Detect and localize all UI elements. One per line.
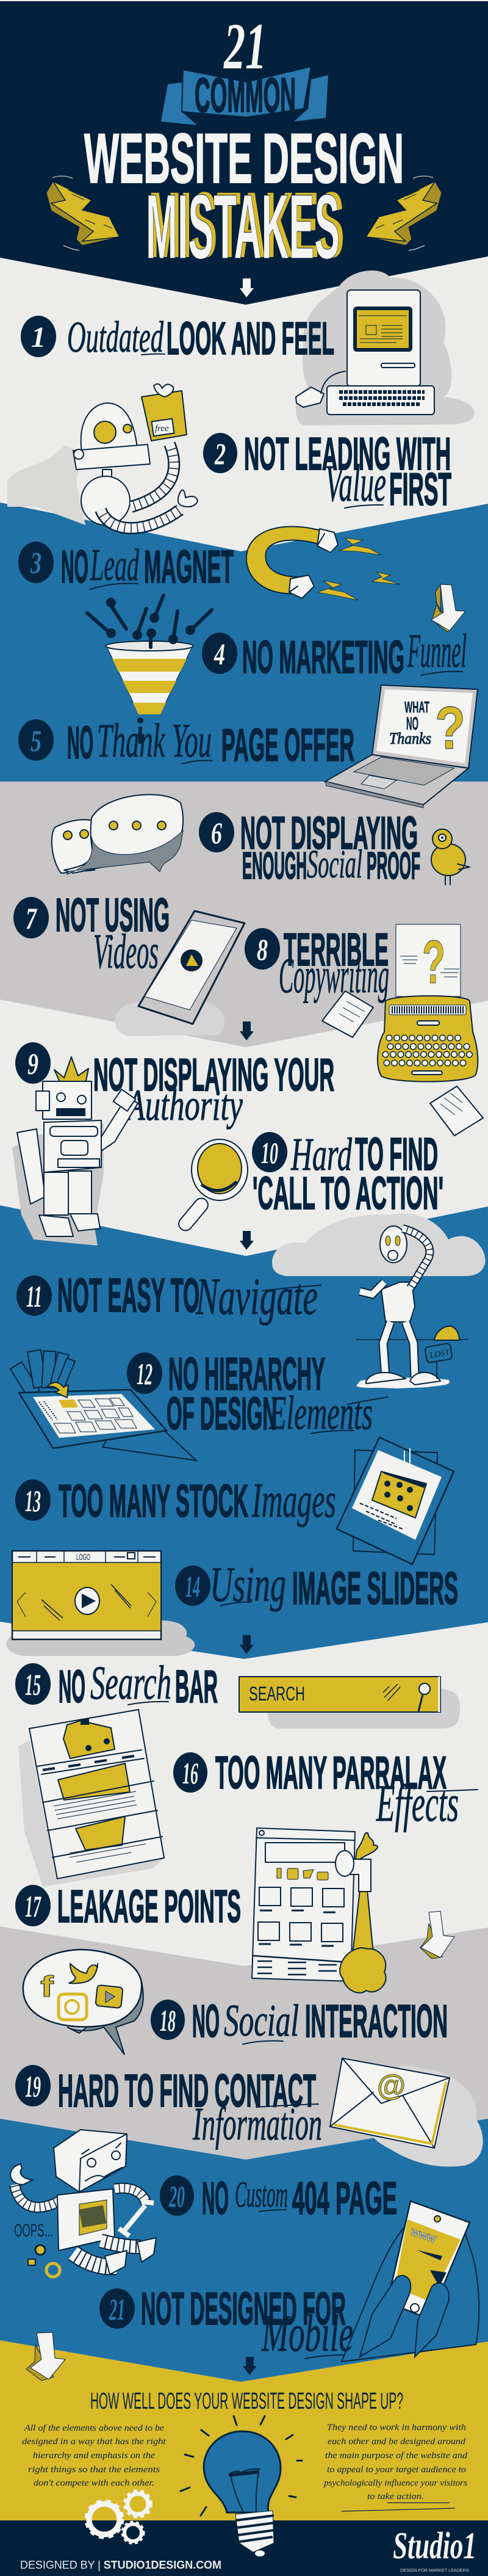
illustration: marketing funnel	[87, 595, 212, 714]
text block: right paragraph: They need to work in harmony with	[327, 2423, 466, 2433]
heading 11: NOT EASY TO	[57, 1268, 199, 1322]
twitter icon	[69, 1964, 98, 1983]
pipe	[342, 1859, 371, 1892]
illustration: broken robot	[10, 2130, 156, 2277]
icon: lightbulb	[181, 2416, 302, 2556]
laptop base	[325, 755, 468, 805]
robot head	[54, 2130, 127, 2192]
illustration: old computer	[296, 270, 475, 426]
heading 9: Authority	[124, 1081, 243, 1130]
laptop screen	[372, 685, 478, 768]
illustration: laptop	[325, 685, 478, 808]
robot head	[81, 403, 138, 455]
swatches	[10, 1350, 75, 1398]
number badge 7: 7	[26, 901, 37, 935]
heading 21	[141, 2283, 353, 2362]
illustration: laptop: NO	[406, 714, 418, 734]
grey cloud behind computer	[296, 270, 475, 426]
text block: right paragraph: each other and be designed around	[328, 2437, 466, 2447]
illustration: lost robot	[356, 1226, 468, 1388]
title: COMMON	[195, 68, 296, 122]
lost sign	[425, 1343, 453, 1363]
left arm and claw	[15, 2185, 59, 2207]
number badge 8: 8	[257, 932, 268, 967]
number badge 19	[15, 2065, 51, 2106]
slider nav	[13, 1551, 160, 1631]
illustration: laptop: Thanks	[389, 730, 431, 747]
heading 1	[67, 313, 334, 364]
large bubble	[64, 794, 183, 873]
text block: right paragraph: psychologically influence your visitors	[323, 2478, 467, 2488]
tiles	[258, 1887, 344, 1942]
illustration: laptop: WHAT	[404, 698, 429, 716]
arrow: dark down four	[243, 2357, 257, 2375]
page shadow	[18, 1740, 165, 1887]
panel: grey section one	[0, 782, 488, 1047]
typewriter body	[378, 996, 478, 1082]
panel: grey section two	[0, 1926, 488, 2160]
text block: left paragraph: designed in a way that has the right	[22, 2437, 167, 2447]
number badge 10	[252, 1132, 287, 1172]
number badge 18	[151, 2000, 185, 2040]
text block: left paragraph: right things so that the elements	[28, 2465, 160, 2475]
heading 20: Custom	[235, 2174, 288, 2215]
panel: blue section one	[0, 503, 488, 782]
title	[84, 10, 404, 278]
heading 3: Lead	[90, 540, 140, 590]
text block: right paragraph: the main purpose of the website and	[325, 2451, 468, 2461]
heading 8	[279, 924, 389, 1003]
icon: floating paper two	[430, 1086, 483, 1136]
robot body	[81, 476, 130, 525]
slider shadow	[6, 1620, 195, 1656]
number badge 19: 19	[25, 2069, 41, 2103]
arrow: white 3d down three	[26, 2332, 65, 2381]
number badge 21: 21	[109, 2292, 125, 2326]
icon: left lightning arrow	[46, 176, 120, 250]
heading 12: Elements	[268, 1386, 373, 1439]
icon: floating paper one	[322, 991, 373, 1037]
panel: footer navy	[0, 2520, 488, 2576]
number badge 6	[199, 812, 234, 852]
thumbs	[360, 2276, 411, 2357]
cloud under phone	[115, 1003, 224, 1036]
illustration: envelope: @	[377, 2070, 406, 2102]
illustration: parallax page	[18, 1710, 165, 1887]
illustration: smartphone with play button	[138, 911, 245, 1024]
heading 10	[253, 1128, 443, 1219]
illustration: hands holding phone: WWW	[409, 2227, 437, 2245]
number badge 10: 10	[261, 1136, 278, 1170]
robot body	[57, 2189, 115, 2251]
heading 6	[240, 807, 420, 887]
horizon	[356, 1339, 468, 1340]
illustration: robot with gift: free	[155, 424, 169, 434]
number badge 3	[18, 542, 54, 583]
illustration: image slider: LOGO	[76, 1552, 90, 1562]
heading 7	[56, 889, 170, 979]
icon: right lightning arrow	[366, 176, 442, 250]
heading 11: Navigate	[195, 1267, 318, 1326]
slider controls	[17, 1592, 156, 1617]
heading 2	[244, 428, 451, 515]
heading 12: OF DESIGN	[167, 1388, 277, 1439]
number badge 1: 1	[31, 321, 46, 354]
illustration: lost robot: LOST	[428, 1348, 451, 1361]
heading 14	[210, 1556, 458, 1614]
crown	[54, 1057, 88, 1084]
heading 13: TOO MANY STOCK	[59, 1475, 248, 1526]
instagram icon	[59, 1994, 87, 2020]
heading 5: Thank You	[97, 714, 212, 767]
heading 18: Social	[224, 1996, 299, 2046]
title number 21: 21	[223, 10, 267, 83]
text block: left paragraph: don't compete with each other.	[34, 2478, 154, 2488]
number badge 15	[15, 1663, 51, 1705]
legs	[44, 1172, 68, 1215]
text block: left paragraph: hierarchy and emphasis on the	[33, 2451, 155, 2461]
number badge 8	[245, 928, 280, 970]
people falling	[87, 595, 212, 647]
heading 2: Value	[325, 454, 386, 512]
robot parts	[63, 1721, 115, 1758]
robot shadow	[7, 446, 85, 525]
arrow: header down	[240, 278, 254, 297]
text block: right paragraph: to take action.	[367, 2492, 424, 2502]
illustration: polaroid with cheese	[337, 1437, 454, 1564]
illustration: image slider	[6, 1551, 195, 1656]
number badge 11	[16, 1275, 52, 1316]
arrow: dark down three	[240, 1635, 254, 1654]
arm raised	[101, 1097, 138, 1151]
text: MAGNET	[144, 541, 234, 592]
number badge 16	[173, 1752, 207, 1793]
number badge 14	[175, 1566, 210, 1606]
number badge 3: 3	[30, 545, 41, 579]
number badge 9	[15, 1042, 51, 1084]
arrow: dark down one	[240, 1021, 254, 1040]
shadow	[12, 1123, 104, 1246]
heading 18	[192, 1995, 448, 2047]
tablet	[19, 1390, 167, 1448]
heading 15: Search	[90, 1656, 171, 1709]
text: NOT USING	[56, 889, 170, 942]
phone	[387, 2201, 470, 2319]
scattered gears	[35, 2245, 45, 2255]
typewriter keys	[389, 1034, 465, 1042]
panel: header navy	[0, 1, 488, 305]
number badge 12: 12	[137, 1357, 152, 1391]
panel: blue section two	[0, 1205, 488, 1659]
number badge 5: 5	[30, 724, 41, 758]
left arm	[17, 1129, 45, 1204]
social icons	[277, 1868, 328, 1880]
legs	[383, 1322, 415, 1377]
video icon	[95, 1985, 123, 2008]
far hand	[342, 2222, 479, 2362]
neck	[102, 470, 112, 485]
number badge 4: 4	[214, 637, 225, 671]
bulb base	[235, 2511, 274, 2552]
panel: yellow conclusion	[0, 2340, 488, 2520]
illustration: speech bubbles	[52, 794, 183, 874]
number badge 7	[13, 897, 49, 938]
small bubble	[52, 819, 95, 873]
illustration: typewriter	[378, 924, 478, 1082]
number badge 13: 13	[25, 1484, 41, 1518]
heading 3	[61, 540, 234, 592]
icon: yellow bird	[431, 829, 470, 885]
heading 10: Hard	[290, 1129, 353, 1180]
wrench	[119, 2202, 154, 2236]
bands	[37, 1750, 162, 1857]
robot arms	[131, 444, 174, 507]
heading 5	[67, 714, 354, 771]
footer credit: DESIGNED BY | STUDIO1DESIGN.COM	[20, 2559, 221, 2571]
heading 9	[93, 1049, 334, 1130]
lightning sparks	[317, 538, 400, 600]
arrow: white 3d down one	[431, 584, 465, 632]
text block: left paragraph: All of the elements above need to be	[24, 2423, 164, 2433]
heading 18: NO	[192, 1995, 220, 2047]
heading 19	[58, 2065, 322, 2150]
facebook icon: f	[40, 1971, 54, 2003]
icon: magnifying glass	[176, 1139, 248, 1233]
number badge 2	[203, 433, 237, 473]
illustration: hands holding phone	[342, 2201, 479, 2362]
number badge 17	[15, 1885, 51, 1926]
gift	[142, 391, 187, 441]
number badge 18: 18	[160, 2003, 176, 2037]
robot legs	[73, 2253, 116, 2267]
text block: left paragraph	[22, 2423, 167, 2488]
torso	[381, 1282, 415, 1322]
oops label: OOPS...	[14, 2221, 53, 2241]
mouse	[296, 387, 324, 407]
number badge 1	[21, 316, 56, 357]
heading 1: Outdated	[67, 313, 164, 361]
number badge 17: 17	[25, 1889, 41, 1923]
shadow	[268, 1689, 460, 1729]
heading 7: Videos	[93, 925, 159, 979]
heading 6: Social	[307, 842, 362, 887]
illustration: envelope	[330, 2058, 450, 2148]
illustration: search bar: SEARCH	[249, 1683, 305, 1705]
illustration: social speech bubble	[23, 1950, 143, 2055]
number badge 12	[127, 1352, 162, 1394]
illustration: tablet and swatches	[10, 1350, 196, 1460]
number badge 20	[160, 2175, 194, 2216]
heading 6: ENOUGH	[242, 845, 307, 887]
heading 13: Images	[251, 1474, 336, 1528]
yellow curved arrow	[46, 1382, 68, 1398]
illustration: search bar	[239, 1677, 460, 1729]
text block: right paragraph: to appeal to your target audience to	[327, 2465, 467, 2475]
text: LEAKAGE POINTS	[57, 1881, 241, 1932]
illustration: leaking web page	[252, 1828, 386, 1993]
leak stream	[353, 1890, 373, 1954]
feet and puddle	[356, 1377, 450, 1388]
icon: white gears	[86, 2491, 151, 2544]
arrow: dark down two	[240, 1231, 254, 1250]
number badge 4	[202, 633, 237, 674]
heading 5: NO	[67, 717, 93, 768]
heading 20: NO	[202, 2172, 229, 2224]
number badge 9: 9	[27, 1047, 38, 1081]
paper in typewriter	[396, 924, 461, 996]
illustration: robot with gift	[7, 384, 198, 528]
heading 14: Using	[210, 1556, 286, 1612]
heading 20	[202, 2172, 397, 2224]
heading 21: Mobile	[261, 2304, 353, 2362]
number badge 16: 16	[182, 1756, 198, 1790]
number badge 15: 15	[25, 1667, 41, 1702]
logo: studio1: DESIGN FOR MARKET LEADERS	[400, 2567, 469, 2573]
head	[380, 1226, 407, 1263]
number badge 11: 11	[26, 1279, 42, 1313]
cloud behind lost robot	[272, 1213, 486, 1276]
number badge 6: 6	[211, 816, 222, 850]
right arm	[115, 2188, 146, 2204]
number badge 13	[15, 1479, 51, 1521]
heading 16	[215, 1747, 478, 1832]
light rays	[181, 2416, 302, 2516]
illustration: laptop: ?	[435, 694, 465, 761]
arms	[403, 1228, 429, 1288]
head	[43, 1081, 92, 1119]
heading 12	[167, 1348, 388, 1439]
body	[44, 1120, 101, 1172]
number badge 21	[99, 2288, 135, 2329]
number badge 5	[18, 719, 54, 761]
number badge 14: 14	[185, 1569, 200, 1603]
icon: horseshoe magnet	[246, 526, 400, 600]
illustration: typewriter: ?	[422, 928, 445, 996]
keyboard	[327, 386, 434, 415]
heading 15: NO	[59, 1661, 85, 1712]
cloud behind envelope	[366, 2066, 483, 2167]
monitor	[347, 290, 420, 386]
heading 19: Information	[192, 2099, 322, 2150]
heading 3: NO	[61, 541, 88, 592]
illustration: toy robot with crown	[12, 1057, 138, 1246]
number badge 20: 20	[168, 2179, 185, 2213]
text: BAR	[175, 1661, 218, 1712]
number badge 2: 2	[214, 437, 226, 471]
arrow: white 3d down two	[420, 1911, 454, 1959]
heading 13	[59, 1474, 336, 1528]
panel: blue section three	[0, 2113, 488, 2382]
ribbon	[161, 67, 328, 125]
back tablet	[102, 1399, 196, 1460]
text block: right paragraph	[323, 2423, 468, 2511]
